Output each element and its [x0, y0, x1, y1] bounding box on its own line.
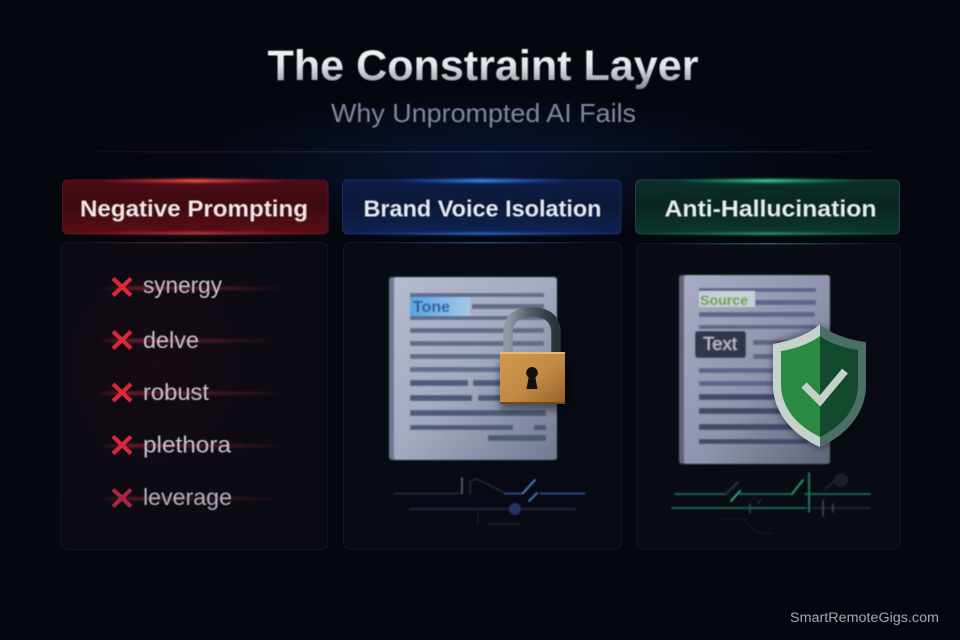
- watermark: SmartRemoteGigs.com: [790, 610, 939, 625]
- title: The Constraint Layer: [268, 42, 699, 90]
- card: document with padlock: [344, 242, 622, 549]
- list item: synergy: synergy: [143, 272, 222, 298]
- icon: shield with check: [773, 324, 866, 449]
- heading: negative prompting: Negative Prompting: [80, 196, 308, 222]
- list item: robust: robust: [143, 379, 209, 405]
- card: banned word list: [60, 242, 328, 550]
- heading: brand voice isolation: Brand Voice Isolation: [364, 196, 602, 222]
- heading: anti-hallucination: Anti-Hallucination: [664, 196, 876, 222]
- tag: source: Source: [700, 292, 748, 308]
- card: document with shield: [636, 243, 900, 549]
- heading: brand voice isolation: [342, 179, 621, 235]
- icon: padlock: [500, 312, 566, 410]
- list item: leverage: [100, 484, 290, 510]
- circuit decoration: green: [672, 473, 870, 533]
- list item: delve: delve: [143, 327, 199, 353]
- list item: delve: [98, 327, 278, 353]
- tag: tone: Tone: [413, 299, 450, 316]
- list item: synergy: [102, 272, 292, 298]
- list item: plethora: plethora: [143, 432, 232, 458]
- icon: document: [679, 275, 830, 464]
- icon: document: [389, 277, 557, 460]
- panel: brand voice isolation: [342, 179, 622, 549]
- tag: text: [695, 331, 746, 358]
- circuit decoration: blue: [395, 478, 585, 524]
- subtitle: Why Unprompted AI Fails: [331, 98, 636, 128]
- list item: robust: [96, 379, 288, 405]
- list item: plethora: [100, 432, 290, 458]
- panel: anti-hallucination: [636, 179, 900, 549]
- heading: anti-hallucination: [636, 179, 900, 235]
- list item: leverage: leverage: [143, 484, 232, 510]
- panel: negative prompting: [60, 179, 328, 550]
- tag: text: Text: [703, 334, 737, 354]
- tag: tone: [410, 297, 470, 316]
- heading: negative prompting: [62, 179, 328, 234]
